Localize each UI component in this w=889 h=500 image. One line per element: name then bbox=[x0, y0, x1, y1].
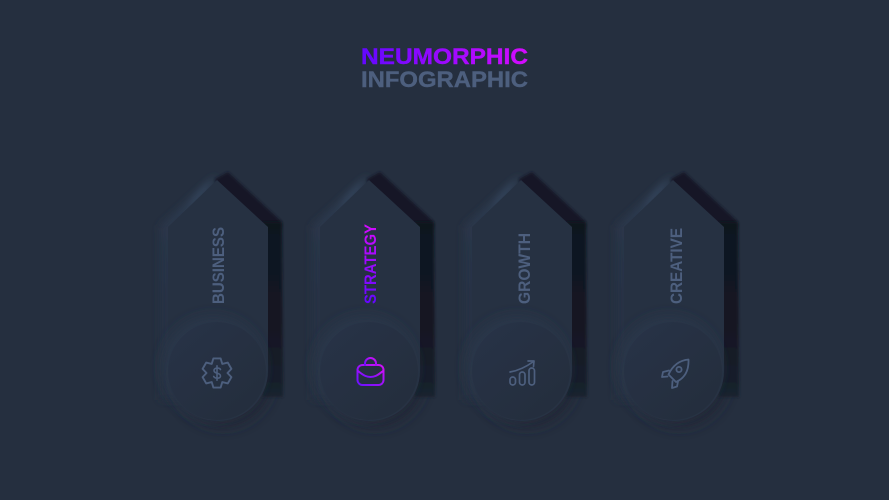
icon: growth chart bbox=[510, 361, 534, 385]
label: creative: CREATIVE bbox=[667, 228, 686, 304]
title line: infographic: INFOGRAPHIC bbox=[361, 67, 528, 92]
label: strategy: STRATEGY bbox=[361, 223, 380, 304]
label: business: BUSINESS bbox=[209, 227, 228, 304]
panel: growth bbox=[464, 172, 587, 426]
panel: business bbox=[160, 172, 283, 426]
panel: creative bbox=[616, 172, 739, 426]
label: growth: GROWTH bbox=[515, 233, 534, 304]
panel: strategy bbox=[312, 172, 435, 426]
icon: gear with dollar bbox=[203, 358, 231, 388]
icon: rocket bbox=[662, 360, 689, 388]
title line: neumorphic: NEUMORPHIC bbox=[361, 44, 528, 69]
icon: briefcase bbox=[358, 358, 384, 385]
title bbox=[361, 44, 528, 92]
